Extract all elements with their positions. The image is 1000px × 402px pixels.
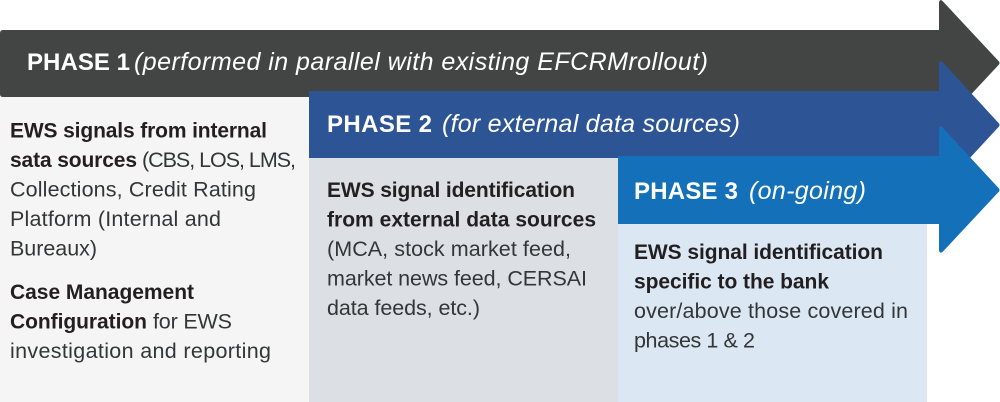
text block: external data sources: from external data sources [327,208,596,232]
panel: phase 3 [618,127,1000,402]
text block: case management: Configuration [10,310,147,334]
text block: case management: for EWS [153,310,232,334]
text block: external data sources: market news feed, CERSAI [327,266,587,290]
text block: internal data sources: EWS signals from internal [10,120,267,142]
text block: internal data sources: Platform (Internal and [10,207,221,231]
text block: external data sources: data feeds, etc.) [327,296,480,320]
arrow: phase 3 [618,127,1000,253]
arrow: phase 1 [0,0,1000,126]
text block: external data sources [327,179,596,320]
text block: external data sources: (MCA, stock market feed, [327,237,571,261]
heading: phase 1: PHASE 1 [27,49,130,76]
heading: phase 2: (for external data sources) [442,110,740,138]
arrow: phase 2 [309,61,1000,188]
text block: bank-specific signals: specific to the bank [634,270,829,294]
heading: phase 1: (performed in parallel with existing EFCRMrollout) [134,48,708,76]
text block: case management [10,281,271,363]
heading: phase 3 [634,177,866,205]
heading: phase 3: (on-going) [749,177,866,205]
text block: bank-specific signals [634,241,908,352]
text block: external data sources: EWS signal identification [327,179,575,202]
panel background: phase 2 [309,157,618,402]
panel background: phase 3 [618,223,927,402]
text block: internal data sources: Bureaux) [10,236,97,260]
text block: internal data sources: Collections, Credit Rating [10,178,256,202]
text block: internal data sources [10,120,296,260]
text block: bank-specific signals: phases 1 & 2 [634,328,755,352]
heading: phase 2: PHASE 2 [327,111,432,138]
text block: internal data sources: sata sources [10,149,137,172]
text block: bank-specific signals: over/above those covered in [634,299,908,323]
text block: case management: investigation and reporting [10,339,271,363]
heading: phase 3: PHASE 3 [634,178,738,205]
text block: internal data sources: (CBS, LOS, LMS, [142,148,296,172]
text block: case management: Case Management [10,281,194,304]
text block: bank-specific signals: EWS signal identification [634,241,883,264]
panel background: phase 1 [0,96,310,402]
panel: phase 2 [309,61,1000,402]
